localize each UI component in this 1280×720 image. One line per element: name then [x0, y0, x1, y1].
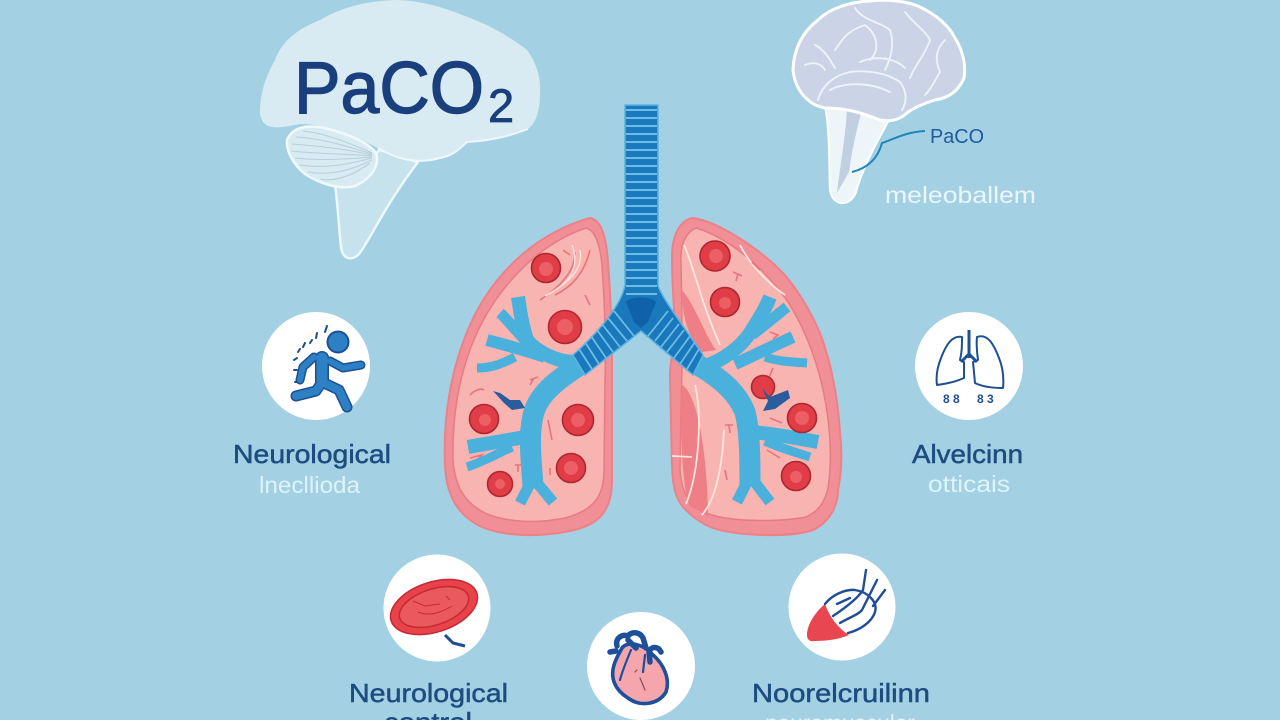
icon: red blood cell	[383, 569, 485, 646]
icon: right lung	[670, 218, 841, 535]
icon circle	[788, 554, 896, 660]
label: Neurological control	[349, 678, 508, 720]
muscle band	[681, 290, 716, 516]
label: Neurological: Neurological	[233, 439, 391, 469]
label: neuromuscular: Noorelcruilinn	[752, 678, 930, 708]
title: PaCO2: 2	[488, 79, 514, 132]
icon: heart	[610, 633, 667, 704]
panel: neurological item (left)	[233, 312, 391, 498]
icon circle	[587, 612, 695, 720]
icon: trachea and bronchi	[573, 105, 703, 375]
panel: red blood cell item	[349, 554, 508, 720]
sublabel: otticais	[928, 471, 1010, 497]
icon: running figure	[294, 326, 361, 407]
label: PaCO: PaCO	[930, 126, 984, 148]
icon: left lung	[445, 218, 612, 535]
icon: brain stem	[825, 100, 889, 203]
panel: large brain with PaCO2 title	[260, 0, 540, 258]
panel: heart item	[587, 612, 695, 720]
icon circle	[384, 554, 490, 662]
icon: cerebrum with gyri	[793, 0, 965, 121]
icon: lungs outline: 8 3	[977, 392, 994, 406]
icon: nerve bundle with red tip	[807, 570, 885, 641]
right bronchial tree	[698, 297, 818, 502]
panel: small brain with metabolism label	[793, 0, 1036, 208]
label: Alveolar: Alvelcinn	[912, 439, 1023, 469]
panel: neuromuscular item	[752, 554, 930, 720]
sublabel: lnecllioda	[259, 472, 360, 498]
panel: alveolar item (right)	[912, 312, 1023, 497]
callout line	[852, 131, 925, 172]
title: PaCO2: PaCO	[294, 48, 484, 129]
icon: translucent cerebrum	[260, 0, 540, 161]
label: Neurological control: Neurological	[349, 678, 508, 708]
icon: cerebellum	[287, 126, 377, 187]
icon: red blood cells	[470, 241, 816, 496]
label: metabolism: meleoballem	[885, 182, 1036, 208]
icon circle	[915, 312, 1023, 420]
left bronchial tree	[467, 297, 580, 503]
panel: central lungs	[445, 105, 841, 535]
icon circle	[262, 312, 370, 420]
icon: translucent brain stem	[335, 150, 418, 258]
decorative white lower edge	[378, 129, 528, 161]
label: tiny marks: 8 8	[943, 392, 960, 406]
icon: small blue clots	[493, 388, 790, 411]
icon: lungs outline	[937, 330, 1003, 406]
